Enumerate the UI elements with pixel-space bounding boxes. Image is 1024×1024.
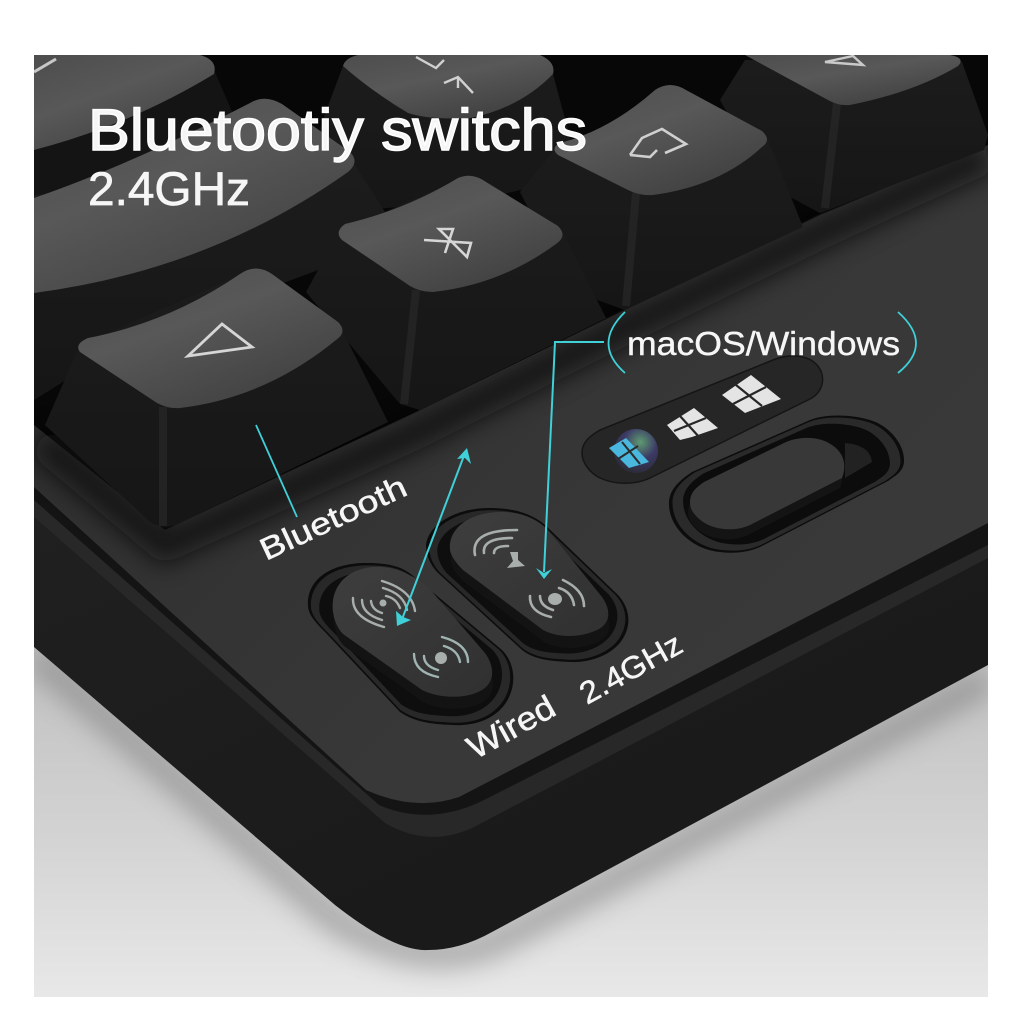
title: Bluetootiy switchs bbox=[88, 98, 587, 163]
keyboard chassis front bbox=[34, 490, 988, 950]
arrow: macOS/Windows to 2.4GHz button bbox=[536, 342, 604, 579]
well behind keys bbox=[34, 55, 988, 530]
icon: bluetooth glyph bbox=[424, 229, 471, 257]
key: triangle bbox=[45, 268, 388, 527]
button: 2.4GHz bbox=[426, 508, 628, 662]
icon: triangle legend bbox=[188, 324, 252, 356]
leader: Bluetooth bbox=[256, 425, 297, 517]
switch knob bbox=[690, 438, 844, 530]
key: long key bbox=[34, 99, 385, 400]
icon: upper signal bbox=[475, 530, 525, 568]
icon: windows large bbox=[722, 375, 781, 413]
icon: upper waves bbox=[353, 581, 415, 627]
subtitle: 2.4GHz bbox=[88, 162, 250, 215]
top plate bbox=[34, 145, 988, 803]
icon: windows small bbox=[667, 408, 718, 440]
label: Wired: Wired bbox=[460, 688, 561, 766]
label: Bluetooth: Bluetooth bbox=[254, 469, 412, 567]
key: top right bbox=[720, 55, 988, 213]
label: macOS/Windows with bracket: macOS/Windows bbox=[627, 325, 900, 362]
label: macOS/Windows with bracket bbox=[608, 312, 916, 373]
button: wired bbox=[308, 563, 513, 725]
icon: colour macOS orb bbox=[609, 429, 658, 473]
plate groove bbox=[34, 470, 988, 815]
key: arrow outline key bbox=[520, 85, 803, 310]
icon: lower signal bbox=[530, 580, 584, 617]
title bbox=[90, 106, 586, 206]
key: top left bbox=[34, 55, 242, 200]
chassis bevel bbox=[34, 480, 988, 837]
soft shadow under keys bbox=[40, 155, 988, 545]
icon: lower waves bbox=[414, 637, 468, 677]
OS indicator pill bbox=[582, 356, 823, 483]
key: top centre bbox=[320, 55, 570, 208]
arrow: double-headed wired bbox=[396, 448, 471, 626]
slide switch bbox=[669, 416, 904, 553]
studio background bbox=[34, 620, 988, 997]
keyboard shadow on surface bbox=[34, 655, 988, 954]
label: 2.4GHz: 2.4GHz bbox=[573, 626, 688, 711]
key: bluetooth bbox=[306, 175, 606, 410]
